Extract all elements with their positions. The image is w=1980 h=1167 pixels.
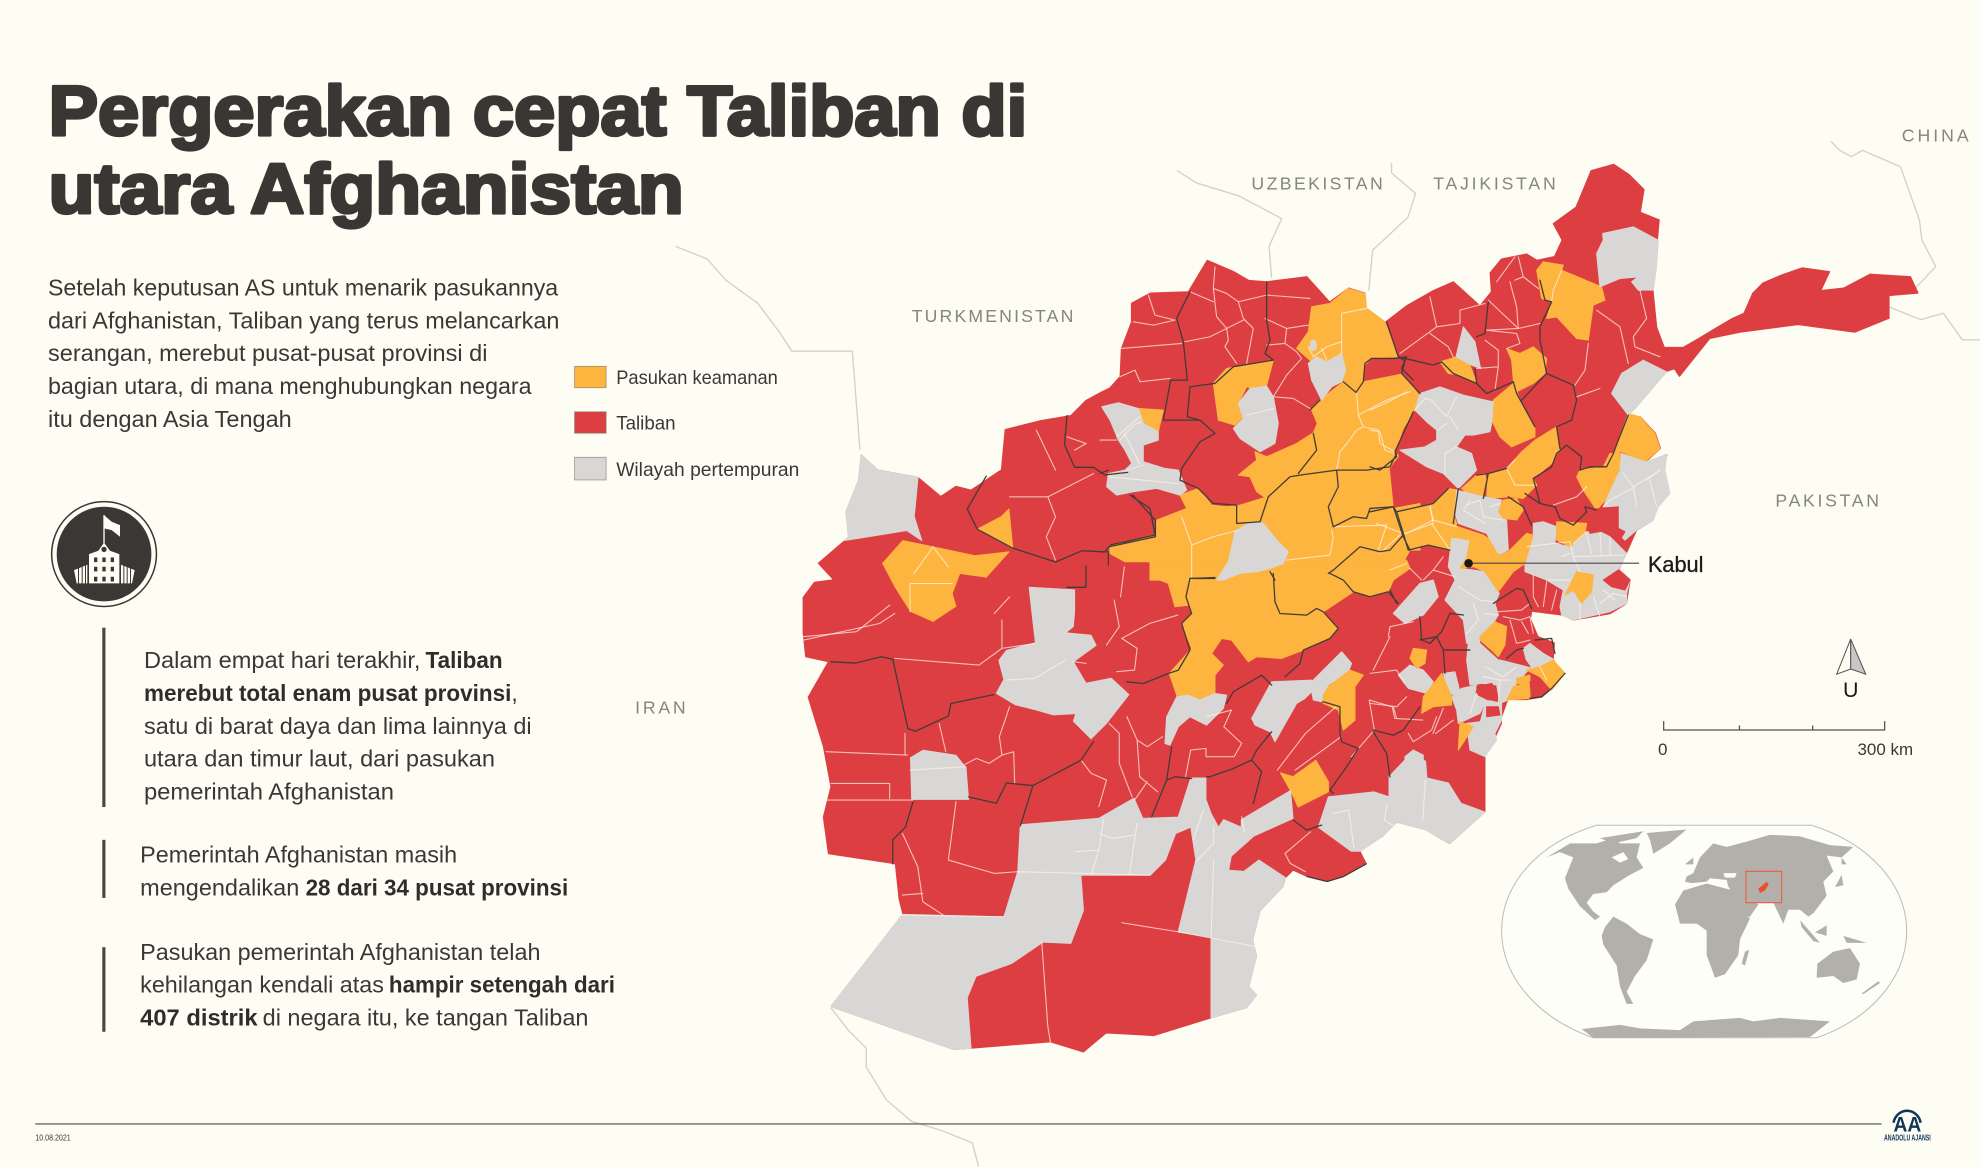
text block: 28 of 34 provincial centres: Pemerintah Afghanistan masih xyxy=(140,842,457,868)
scale bar: 300 km xyxy=(1858,740,1913,759)
district boundaries north-central xyxy=(1100,267,1410,580)
Kabul marker xyxy=(1464,552,1703,577)
text block: six provincial centres: Taliban xyxy=(426,647,503,673)
north arrow: U xyxy=(1843,678,1858,702)
legend: Wilayah pertempuran xyxy=(616,460,799,481)
map base: Taliban-held territory xyxy=(803,164,1918,1052)
text block: nearly half of 407 districts: Pasukan pemerintah Afghanistan telah xyxy=(140,939,540,965)
icon: government building with flag xyxy=(52,502,156,606)
security forces: Kabul and eastern pockets xyxy=(1410,498,1593,750)
contested areas: west and south xyxy=(831,455,1485,1049)
intro text block: itu dengan Asia Tengah xyxy=(48,406,292,432)
province boundaries central south xyxy=(1127,573,1420,830)
scale bar: 0 xyxy=(1658,740,1667,759)
country label: China: CHINA xyxy=(1902,126,1969,146)
text block: nearly half of 407 districts: hampir setengah dari xyxy=(389,972,615,998)
text block: 28 of 34 provincial centres: 28 dari 34 pusat provinsi xyxy=(306,874,568,900)
text block: six provincial centres: utara dan timur laut, dari pasukan xyxy=(144,746,495,772)
country label: Uzbekistan: UZBEKISTAN xyxy=(1251,174,1383,194)
intro text block: bagian utara, di mana menghubungkan negara xyxy=(48,373,532,399)
legend: Taliban xyxy=(616,413,676,434)
intro text block: Setelah keputusan AS untuk menarik pasukannya xyxy=(48,275,558,301)
contested areas: north-central xyxy=(1102,340,1346,580)
logo: Anadolu Ajansi: ANADOLU AJANSI xyxy=(1884,1133,1931,1142)
intro text block: serangan, merebut pusat-pusat provinsi di xyxy=(48,340,487,366)
intro text block: dari Afghanistan, Taliban yang terus melancarkan xyxy=(48,307,559,333)
text block: six provincial centres: Dalam empat hari terakhir, xyxy=(144,647,420,673)
country label: Iran: IRAN xyxy=(635,698,686,718)
security forces: Oruzgan area xyxy=(1323,670,1363,730)
north arrow xyxy=(1837,639,1866,702)
country label: Tajikistan: TAJIKISTAN xyxy=(1433,174,1556,194)
security forces: north-east areas xyxy=(1370,262,1660,550)
security forces: central south areas xyxy=(1150,560,1410,700)
intro text block xyxy=(48,275,559,432)
province boundaries north-central xyxy=(1100,282,1413,580)
district boundaries south xyxy=(803,600,1453,1042)
district boundaries west and south xyxy=(803,417,1178,640)
text block: 28 of 34 provincial centres: mengendalikan xyxy=(140,874,299,900)
Taliban pockets in the east xyxy=(1477,507,1630,717)
footer rule xyxy=(35,1123,1882,1125)
text block: nearly half of 407 districts: kehilangan kendali atas xyxy=(140,972,384,998)
title xyxy=(49,71,1027,228)
scale bar xyxy=(1658,721,1913,759)
district boundaries south-east xyxy=(1370,507,1627,742)
logo: Anadolu Ajansi xyxy=(1884,1111,1931,1142)
text block: 28 of 34 provincial centres xyxy=(102,840,568,900)
legend xyxy=(575,366,799,481)
text block: six provincial centres: merebut total enam pusat provinsi xyxy=(144,680,511,706)
logo: Anadolu Ajansi: AA xyxy=(1894,1113,1921,1137)
text block: six provincial centres: satu di barat daya dan lima lainnya di xyxy=(144,713,532,739)
date: 10.08.2021 xyxy=(35,1133,71,1142)
legend: Pasukan keamanan xyxy=(616,368,778,389)
title: utara Afghanistan xyxy=(49,149,684,228)
province boundaries south-east xyxy=(1390,588,1565,698)
Kabul marker: Kabul xyxy=(1648,552,1703,577)
province boundaries west xyxy=(831,416,1366,882)
text block: nearly half of 407 districts xyxy=(102,939,615,1032)
text block: nearly half of 407 districts: di negara itu, ke tangan Taliban xyxy=(263,1004,588,1030)
contested areas: Kabul region and south-east xyxy=(1393,490,1630,760)
text block: six provincial centres: , xyxy=(511,680,518,706)
country label: Turkmenistan: TURKMENISTAN xyxy=(912,306,1073,326)
country label: Pakistan: PAKISTAN xyxy=(1775,490,1879,510)
neighbouring country borders xyxy=(676,142,1980,1167)
contested areas: north-east xyxy=(1400,227,1670,540)
contested areas: Oruzgan band xyxy=(1252,652,1352,742)
text block: six provincial centres xyxy=(102,628,532,807)
text block: nearly half of 407 districts: 407 distrik xyxy=(140,1004,258,1030)
text block: six provincial centres: pemerintah Afghanistan xyxy=(144,778,394,804)
security forces: north-central areas xyxy=(1110,288,1420,580)
contested areas: centre-south pockets xyxy=(1165,693,1227,745)
map of Afghanistan xyxy=(803,164,1918,1052)
security forces: western areas xyxy=(883,509,1328,807)
district boundaries north-east xyxy=(1370,257,1660,550)
title: Pergerakan cepat Taliban di xyxy=(49,71,1027,150)
locator world map xyxy=(1502,825,1907,1038)
province boundaries north-east xyxy=(1370,280,1628,550)
